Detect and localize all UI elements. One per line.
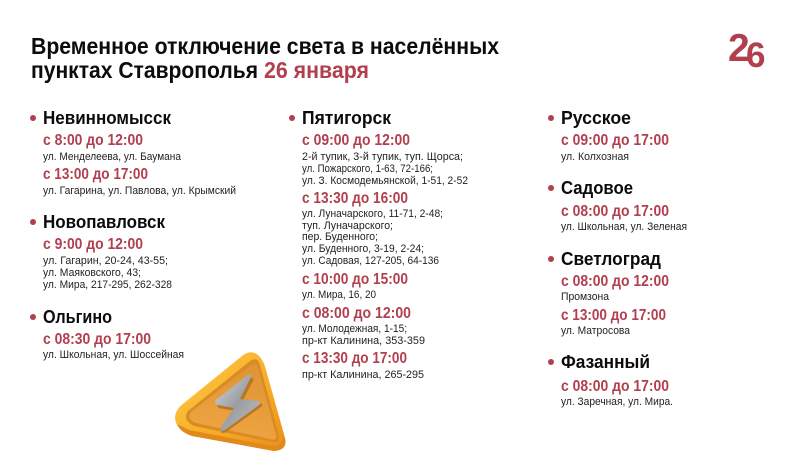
bullet [548, 256, 554, 262]
city heading: Невинномысск [43, 108, 172, 128]
time slot: с 08:00 до 17:00 [561, 203, 669, 220]
column: Ольгино [30, 307, 184, 361]
streets [302, 208, 443, 267]
logo: 26 [728, 27, 765, 75]
streets [302, 151, 468, 187]
column: Светлоград [548, 249, 669, 337]
city heading: Светлоград [561, 249, 662, 269]
streets: пер. Буденного; [302, 231, 378, 243]
streets: ул. Менделеева, ул. Баумана [43, 151, 182, 163]
streets: ул. Пожарского, 1-63, 72-166; [302, 163, 433, 175]
streets: пр-кт Калинина, 265-295 [302, 369, 424, 381]
logo: 26: 6 [746, 36, 765, 75]
bullet [289, 115, 295, 121]
time slot: с 8:00 до 12:00 [43, 132, 143, 149]
time slot: с 13:00 до 17:00 [561, 307, 666, 324]
title [31, 33, 499, 83]
streets: ул. Садовая, 127-205, 64-136 [302, 255, 439, 267]
bullet [548, 115, 554, 121]
streets: ул. Гагарин, 20-24, 43-55; [43, 255, 168, 267]
streets: ул. З. Космодемьянской, 1-51, 2-52 [302, 175, 468, 187]
title: 26 января [264, 57, 369, 83]
time slot: с 13:30 до 17:00 [302, 350, 407, 367]
streets: ул. Буденного, 3-19, 2-24; [302, 243, 424, 255]
time slot: с 13:30 до 16:00 [302, 190, 408, 207]
streets: ул. Молодежная, 1-15; [302, 323, 407, 335]
streets: ул. Заречная, ул. Мира. [561, 396, 673, 408]
streets: ул. Мира, 16, 20 [302, 289, 376, 301]
column: Фазанный [548, 352, 673, 408]
time slot: с 10:00 до 15:00 [302, 271, 408, 288]
time slot: с 9:00 до 12:00 [43, 236, 143, 253]
city heading: Новопавловск [43, 212, 166, 232]
streets: ул. Матросова [561, 325, 631, 337]
time slot: с 09:00 до 17:00 [561, 132, 669, 149]
time slot: с 09:00 до 12:00 [302, 132, 410, 149]
city heading: Ольгино [43, 307, 112, 327]
time slot: с 08:00 до 17:00 [561, 378, 669, 395]
streets: пр-кт Калинина, 353-359 [302, 335, 425, 347]
time slot: с 13:00 до 17:00 [43, 166, 148, 183]
city heading: Пятигорск [302, 108, 392, 128]
bullet [30, 219, 36, 225]
time slot: с 08:00 до 12:00 [561, 273, 669, 290]
city heading: Садовое [561, 178, 633, 198]
title: Временное отключение света в населённых [31, 33, 499, 59]
title: пунктах Ставрополья [31, 57, 258, 83]
city heading: Фазанный [561, 352, 650, 372]
streets: ул. Гагарина, ул. Павлова, ул. Крымский [43, 185, 236, 197]
streets [302, 323, 425, 347]
streets: ул. Луначарского, 11-71, 2-48; [302, 208, 443, 220]
bullet [548, 185, 554, 191]
streets: ул. Школьная, ул. Шоссейная [43, 349, 184, 361]
column: Пятигорск [289, 108, 468, 381]
bullet [30, 115, 36, 121]
bullet [548, 359, 554, 365]
streets: ул. Колхозная [561, 151, 629, 163]
streets: ул. Школьная, ул. Зеленая [561, 221, 687, 233]
icon: warning triangle with lightning bolt [175, 352, 286, 451]
city heading: Русское [561, 108, 631, 128]
streets: 2-й тупик, 3-й тупик, туп. Щорса; [302, 151, 463, 163]
column: Садовое [548, 178, 687, 233]
logo: 26: 2 [728, 27, 750, 70]
column: Русское [548, 108, 669, 163]
bullet [30, 314, 36, 320]
streets: ул. Мира, 217-295, 262-328 [43, 279, 172, 291]
streets: Промзона [561, 291, 610, 303]
time slot: с 08:00 до 12:00 [302, 305, 411, 322]
column: Невинномысск [30, 108, 236, 197]
streets: ул. Маяковского, 43; [43, 267, 141, 279]
streets [43, 255, 172, 291]
time slot: с 08:30 до 17:00 [43, 331, 151, 348]
column: Новопавловск [30, 212, 172, 291]
streets: туп. Луначарского; [302, 220, 393, 232]
